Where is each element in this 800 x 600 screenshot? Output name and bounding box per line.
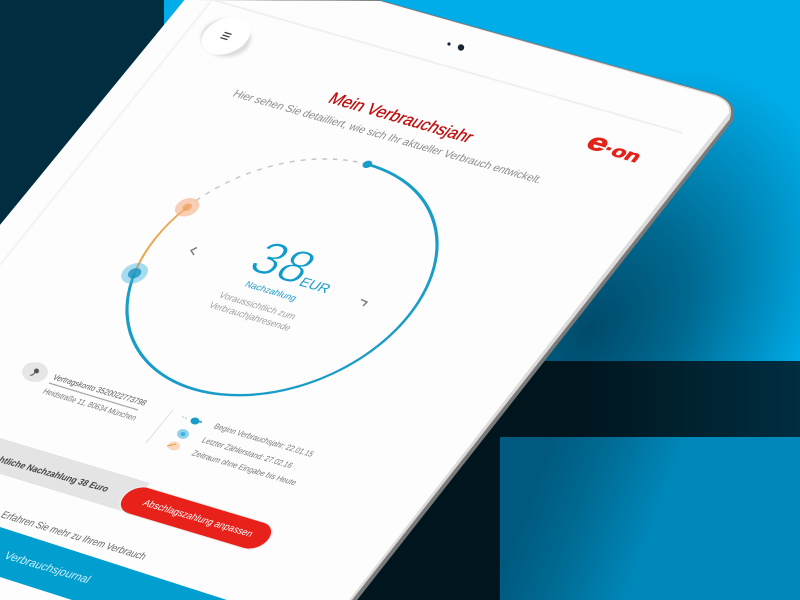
legend icon: year start xyxy=(182,416,202,424)
legend icon: no input period xyxy=(167,442,180,450)
marker: orange halo xyxy=(170,195,204,219)
unit EUR: EUR xyxy=(296,274,334,296)
legend icon: last reading xyxy=(177,429,189,439)
marker: year start xyxy=(361,160,374,169)
camera dots xyxy=(447,42,464,51)
background: dark band xyxy=(0,361,800,437)
note line 2: Verbrauchjahresende xyxy=(206,301,293,333)
marker: blue halo xyxy=(116,260,153,286)
subtitle: Hier sehen Sie detailliert, wie sich Ihr aktueller Verbrauch entwickelt. xyxy=(230,89,545,186)
ring: dashed remaining arc xyxy=(187,129,367,243)
icon: hamburger menu xyxy=(220,32,232,40)
background: blue gradient xyxy=(0,0,800,361)
journal label: Verbrauchsjournal xyxy=(1,549,94,586)
menu button xyxy=(192,12,260,60)
ring chart xyxy=(61,122,501,427)
note line 1: Voraussichtlich zum xyxy=(216,291,298,322)
ring: blue consumption arc xyxy=(72,129,498,427)
logo: e-on: e·on xyxy=(580,128,651,167)
background: dark block bottom xyxy=(0,437,500,600)
link text: Erfahren Sie mehr zu Ihrem Verbrauch xyxy=(0,510,149,562)
button: adjust payment xyxy=(112,482,280,554)
ring: orange arc xyxy=(129,206,187,273)
label Nachzahlung: Nachzahlung xyxy=(243,280,299,303)
contract number: Vertragskonto 3520022773798 xyxy=(51,373,149,407)
contract address: Heidstraße 11, 80634 München xyxy=(41,387,139,422)
chevron right xyxy=(361,300,367,306)
grey summary bar xyxy=(0,438,150,512)
icon: contract plug xyxy=(22,362,48,382)
chevron left xyxy=(191,248,197,255)
amount 38: 38 xyxy=(239,232,328,294)
title: Mein Verbrauchsjahr xyxy=(324,89,478,146)
background: navy block top left xyxy=(0,0,164,361)
legend text: last reading: Letzter Zählerstand: 27.02.16 xyxy=(200,436,295,470)
journal bar xyxy=(0,527,227,600)
legend text: period: Zeitraum ohne Eingabe bis Heute xyxy=(190,449,299,487)
background: blue square bottom right xyxy=(500,437,800,600)
legend text: start: Beginn Verbrauchsjahr: 22.01.15 xyxy=(212,422,316,459)
button label: Abschlagszahlung anpassen xyxy=(140,499,255,539)
